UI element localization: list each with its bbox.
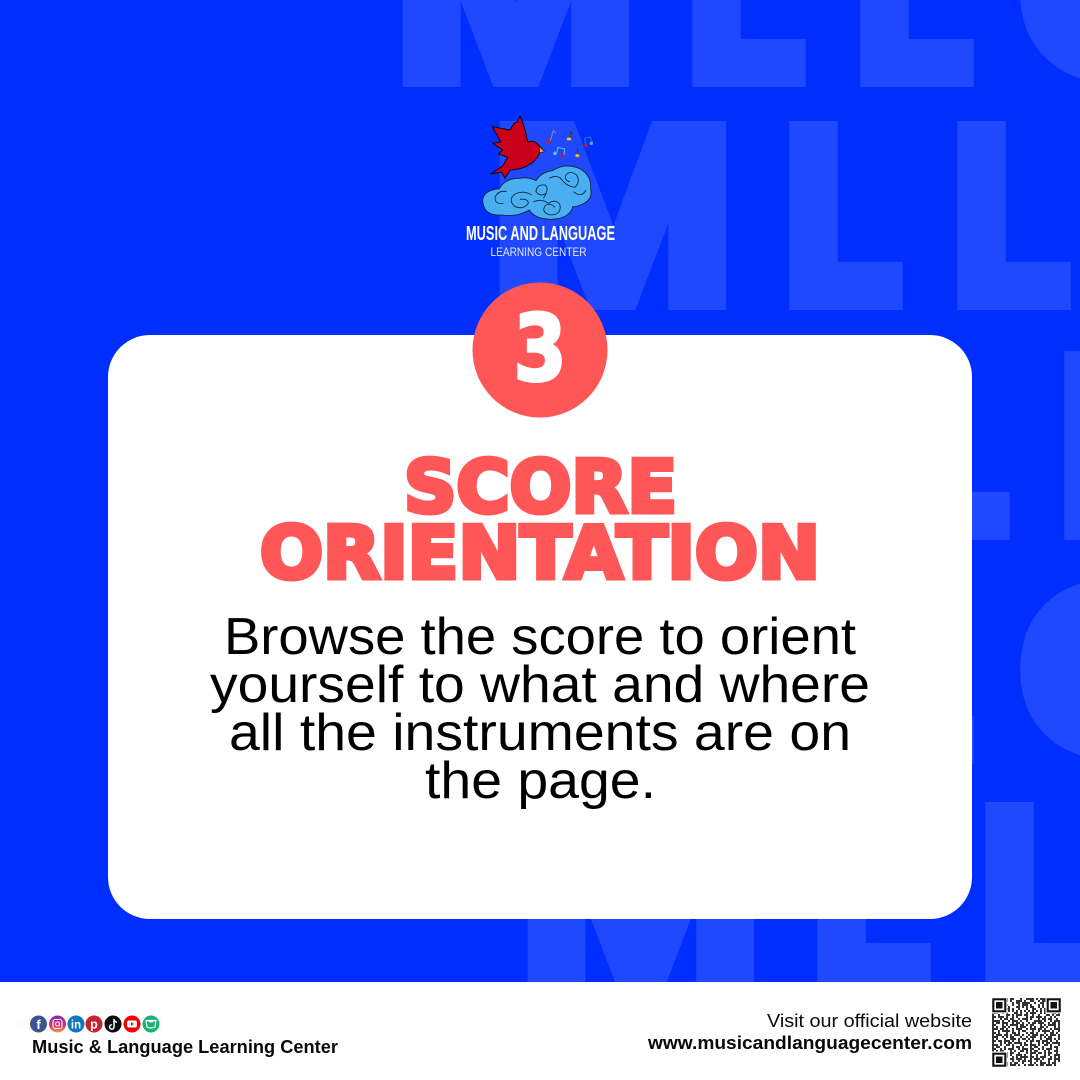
logo: bird, notes, cloud and wordmark bbox=[466, 116, 615, 259]
panel: white content card bbox=[108, 335, 972, 919]
panel: white footer bbox=[0, 982, 1080, 1080]
icon: facebook: f bbox=[36, 1017, 41, 1032]
icon: pinterest: p bbox=[90, 1018, 98, 1032]
QR finder: top right bbox=[1046, 997, 1062, 1014]
text block: description: yourself to what and where bbox=[210, 656, 870, 714]
text: website url: www.musicandlanguagecenter.com bbox=[647, 1033, 972, 1053]
background: oversized MLLC watermark letters: L bbox=[884, 310, 1009, 590]
background: oversized MLLC watermark letters: M bbox=[518, 756, 764, 1036]
icon: tiktok bbox=[104, 1016, 122, 1032]
text: organisation name: Music & Language Learning Center bbox=[32, 1036, 338, 1057]
background: oversized MLLC watermark letters: L bbox=[805, 761, 930, 1041]
text block: description: the page. bbox=[425, 752, 656, 810]
text block: description: all the instruments are on bbox=[229, 704, 851, 762]
text: logo wordmark: MUSIC AND LANGUAGE bbox=[466, 223, 615, 245]
badge: step number circle bbox=[472, 282, 608, 418]
heading: score orientation bbox=[260, 445, 820, 595]
background: oversized MLLC watermark letters: M bbox=[490, 75, 736, 355]
QR finder: bottom left bbox=[991, 1052, 1008, 1068]
text block: description: Browse the score to orient bbox=[224, 608, 857, 666]
QR finder: top left bbox=[991, 997, 1008, 1014]
icon: instagram bbox=[49, 1016, 66, 1032]
icon: QR code bbox=[991, 997, 1062, 1068]
icon: music notes bbox=[546, 131, 593, 157]
heading: score orientation: ORIENTATION bbox=[260, 511, 820, 595]
text block: description bbox=[210, 608, 870, 810]
background: oversized MLLC watermark letters: L bbox=[777, 80, 902, 360]
background: oversized MLLC watermark letters: M bbox=[597, 305, 843, 585]
icon: red bird bbox=[491, 116, 544, 178]
background: oversized MLLC watermark letters: L bbox=[848, 534, 973, 814]
badge: step number circle: 3 bbox=[513, 295, 567, 402]
icon: green shop bbox=[142, 1016, 160, 1032]
text: logo subtitle: LEARNING CENTER bbox=[490, 247, 586, 259]
background: oversized MLLC watermark letters: L bbox=[945, 80, 1070, 360]
background: oversized MLLC watermark letters bbox=[393, 0, 1080, 1041]
background: oversized MLLC watermark letters: M bbox=[393, 529, 639, 809]
icon: youtube bbox=[124, 1016, 140, 1032]
heading: score orientation: SCORE bbox=[404, 445, 677, 529]
background: oversized MLLC watermark letters: L bbox=[680, 534, 805, 814]
icons: social media row bbox=[30, 1016, 160, 1032]
text: website prompt: Visit our official website bbox=[767, 1011, 972, 1031]
icon: linkedin: in bbox=[71, 1020, 81, 1032]
icon: swirling blue cloud bbox=[483, 166, 591, 219]
